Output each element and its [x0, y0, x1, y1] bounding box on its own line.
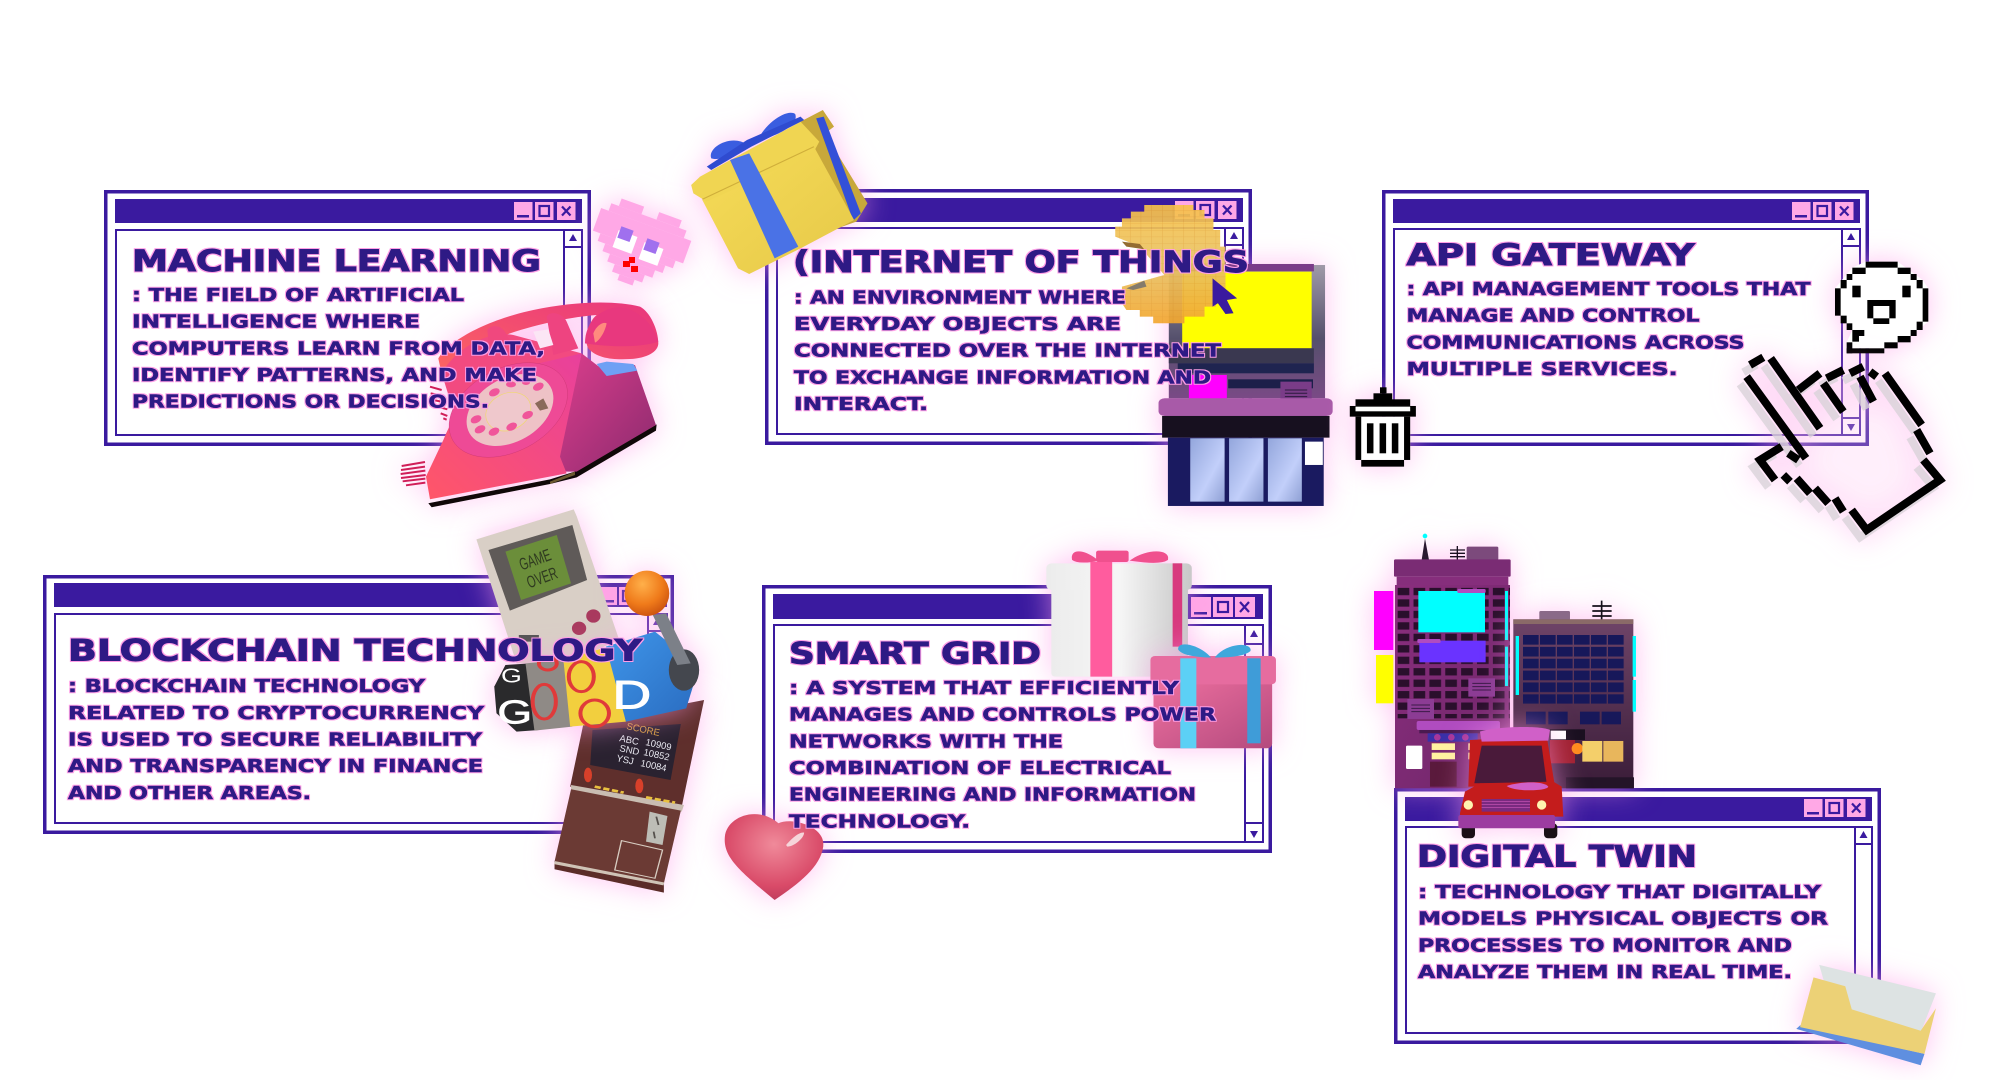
- content area: [777, 228, 1243, 434]
- content area: [1406, 827, 1872, 1033]
- description: Smart Grid: : A SYSTEM THAT EFFICIENTLY: [789, 678, 1180, 699]
- icon: arcade storefront: [1159, 264, 1333, 506]
- icon: arcade cabinet: [555, 700, 704, 893]
- description: API Gateway: COMMUNICATIONS ACROSS: [1406, 332, 1744, 353]
- description: Machine Learning: COMPUTERS LEARN FROM DATA,: [132, 338, 545, 359]
- panel: Smart Grid window: [764, 587, 1270, 851]
- description: Smart Grid: MANAGES AND CONTROLS POWER: [789, 705, 1216, 726]
- icon: neon tower building: [1374, 534, 1511, 788]
- description: Digital Twin: [1418, 882, 1828, 983]
- icon: pink gift box: [1150, 645, 1276, 748]
- icon: handheld game console: [476, 509, 619, 663]
- text block: Internet of Things: [793, 245, 1249, 415]
- description: Machine Learning: PREDICTIONS OR DECISIONS.: [132, 392, 489, 413]
- description: Smart Grid: [789, 678, 1216, 832]
- hand shadow: [1740, 365, 1933, 537]
- panel: Machine Learning window: [106, 192, 589, 444]
- title bar: [776, 198, 1243, 222]
- score text: 10852: [642, 747, 671, 763]
- description: Machine Learning: : THE FIELD OF ARTIFICIAL: [132, 285, 464, 306]
- description: Blockchain Technology: IS USED TO SECURE RELIABILITY: [68, 730, 483, 750]
- icon: pink rotary telephone: [401, 303, 658, 507]
- title bar: [773, 594, 1263, 619]
- icon: white gift box: [1046, 551, 1192, 677]
- description: Blockchain Technology: [68, 676, 485, 804]
- description: API Gateway: [1406, 279, 1811, 380]
- description: Internet of Things: INTERACT.: [794, 394, 928, 415]
- text block: Machine Learning: [132, 244, 545, 413]
- description: Machine Learning: INTELLIGENCE WHERE: [132, 312, 420, 333]
- screen text: [517, 546, 560, 593]
- window buttons: [1191, 597, 1255, 617]
- score text: SND: [618, 743, 640, 758]
- scrollbar: [1225, 228, 1243, 434]
- panel: Internet of Things window: [767, 191, 1250, 443]
- description: Digital Twin: ANALYZE THEM IN REAL TIME.: [1418, 962, 1792, 983]
- scrollbar: [564, 230, 582, 435]
- description: Smart Grid: ENGINEERING AND INFORMATION: [789, 785, 1196, 806]
- heading: Machine Learning: MACHINE LEARNING: [132, 244, 541, 278]
- heading: Digital Twin: DIGITAL TWIN: [1417, 840, 1697, 874]
- lever ball: [625, 571, 669, 616]
- window buttons: [1792, 202, 1854, 220]
- icon: pixel heart: [580, 193, 697, 299]
- text block: Digital Twin: [1417, 840, 1828, 983]
- scrollbar: [1842, 229, 1860, 435]
- icon: slot machine reels with lever: [494, 571, 699, 732]
- scrollbar: [1245, 625, 1263, 842]
- score text: ABC: [618, 733, 640, 748]
- scrollbar: [1855, 827, 1872, 1033]
- heading: Smart Grid: SMART GRID: [789, 636, 1041, 670]
- description: Digital Twin: PROCESSES TO MONITOR AND: [1418, 935, 1792, 956]
- panel: Digital Twin window: [1396, 790, 1879, 1042]
- window buttons: [1804, 799, 1866, 817]
- description: Internet of Things: : AN ENVIRONMENT WHERE: [794, 287, 1126, 308]
- icon: mouse cursor arrow: [1213, 278, 1237, 314]
- content area: [774, 625, 1263, 842]
- panel: Blockchain Technology window: [45, 577, 672, 832]
- description: Internet of Things: EVERYDAY OBJECTS ARE: [794, 314, 1121, 335]
- screen text: GAME: [517, 546, 554, 575]
- icon: pixel speech bubble face: [1835, 262, 1928, 353]
- icon: 3D heart: [725, 814, 823, 900]
- scrollbar: [648, 614, 667, 823]
- icon: orange pixel chomper: [1115, 205, 1226, 323]
- hand outline: [1747, 357, 1940, 530]
- description: API Gateway: MULTIPLE SERVICES.: [1406, 359, 1678, 380]
- text block: Blockchain Technology: [68, 634, 643, 804]
- text block: API Gateway: [1406, 238, 1811, 380]
- score text: SCORE: [625, 721, 661, 739]
- window buttons: [514, 202, 576, 220]
- icon: yellow file folder: [1796, 965, 1936, 1065]
- score text: 10909: [644, 737, 673, 753]
- icon: slot machine reels with lever: G: [497, 694, 532, 731]
- heading: Blockchain Technology: BLOCKCHAIN TECHNOLOGY: [68, 634, 643, 668]
- text block: Smart Grid: [789, 636, 1216, 832]
- icon: red car: [1458, 727, 1563, 838]
- icon: slot machine reels with lever: D: [613, 673, 651, 718]
- description: Smart Grid: TECHNOLOGY.: [789, 811, 970, 832]
- icon: pixel pointing hand: [1740, 357, 1940, 537]
- description: Smart Grid: NETWORKS WITH THE: [789, 731, 1063, 752]
- heading: API Gateway: API GATEWAY: [1406, 238, 1696, 272]
- icon: yellow gift box: [691, 110, 867, 274]
- screen text: OVER: [524, 564, 560, 593]
- score text: [615, 721, 673, 774]
- title bar: [115, 199, 582, 223]
- window buttons: [1175, 201, 1236, 219]
- panel: API Gateway window: [1384, 192, 1867, 444]
- description: Blockchain Technology: AND OTHER AREAS.: [68, 783, 311, 804]
- description: Machine Learning: [132, 285, 545, 413]
- description: Internet of Things: [794, 287, 1222, 415]
- description: API Gateway: MANAGE AND CONTROL: [1406, 306, 1700, 327]
- icon: slot machine reels with lever: G: [501, 666, 522, 688]
- description: Machine Learning: IDENTIFY PATTERNS, AND MAKE: [132, 365, 537, 386]
- description: Internet of Things: CONNECTED OVER THE INTERNET: [794, 341, 1222, 362]
- title bar: [54, 583, 667, 607]
- content area: [55, 614, 667, 823]
- description: Blockchain Technology: RELATED TO CRYPTOCURRENCY: [68, 703, 485, 724]
- description: Blockchain Technology: : BLOCKCHAIN TECHNOLOGY: [68, 676, 426, 697]
- handset earpiece dome: [585, 307, 658, 346]
- description: Digital Twin: : TECHNOLOGY THAT DIGITALLY: [1418, 882, 1822, 903]
- yellow screen: [1182, 272, 1312, 348]
- description: Smart Grid: COMBINATION OF ELECTRICAL: [789, 758, 1171, 779]
- title bar: [1393, 199, 1860, 223]
- description: Internet of Things: TO EXCHANGE INFORMATION AND: [794, 367, 1211, 388]
- icon: pixel trash can: [1350, 387, 1416, 467]
- score text: 10084: [639, 758, 668, 774]
- title bar: [1405, 797, 1872, 821]
- neon signs: [1374, 591, 1393, 650]
- description: API Gateway: : API MANAGEMENT TOOLS THAT: [1406, 279, 1811, 300]
- body behind the handset: [442, 334, 582, 400]
- description: Blockchain Technology: AND TRANSPARENCY IN FINANCE: [68, 756, 483, 777]
- icon: neon office building: [1513, 601, 1636, 788]
- heading: Internet of Things: (INTERNET OF THINGS: [793, 245, 1249, 279]
- telephone cord: [401, 387, 447, 485]
- description: Digital Twin: MODELS PHYSICAL OBJECTS OR: [1418, 909, 1828, 930]
- score text: YSJ: [615, 753, 635, 768]
- content area: [116, 230, 582, 435]
- content area: [1394, 229, 1860, 435]
- window buttons: [599, 587, 658, 605]
